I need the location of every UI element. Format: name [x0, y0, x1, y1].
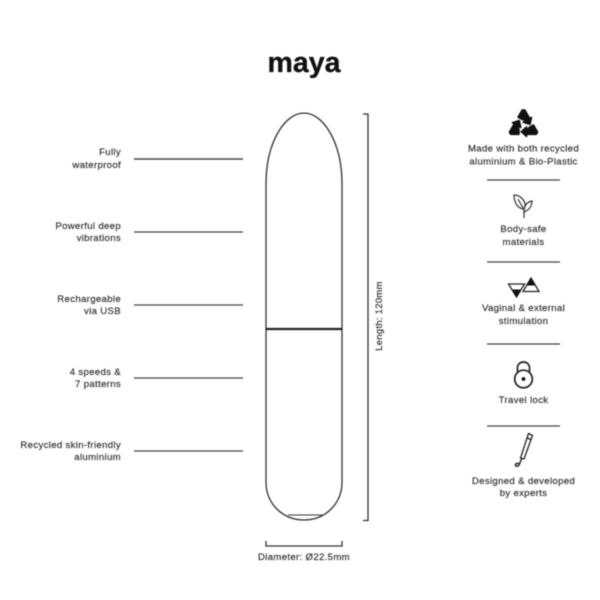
- benefit: travel lock: Travel lock: [499, 395, 548, 406]
- panel: right benefits: [468, 110, 579, 499]
- feature: speeds and patterns: [70, 367, 243, 390]
- feature: rechargeable via USB: via USB: [84, 306, 121, 317]
- benefit: designed by experts: [472, 434, 575, 499]
- benefit: body-safe materials: materials: [503, 237, 544, 248]
- icon: recycling arrows: [506, 110, 540, 140]
- panel: left feature labels: [20, 147, 243, 463]
- feature: speeds and patterns: 4 speeds &: [70, 367, 121, 378]
- feature: powerful deep vibrations: vibrations: [77, 233, 121, 244]
- feature: rechargeable via USB: [57, 294, 243, 317]
- length dimension: [363, 114, 384, 520]
- benefit: vaginal and external stimulation: Vaginal & external: [482, 303, 565, 314]
- benefit: recycled materials: [468, 110, 579, 168]
- feature: speeds and patterns: 7 patterns: [75, 379, 121, 390]
- title: maya: [268, 47, 342, 79]
- benefit: recycled materials: aluminium & Bio-Plastic: [469, 156, 578, 168]
- feature: fully waterproof: [71, 147, 243, 171]
- benefit: recycled materials: Made with both recycled: [468, 144, 579, 154]
- benefit: vaginal and external stimulation: [482, 278, 565, 327]
- benefit: travel lock: [499, 362, 548, 406]
- length dimension: Length: 120mm: [373, 281, 384, 351]
- feature: recycled aluminium: Recycled skin-friendly: [20, 440, 121, 451]
- icon: triangles: [508, 278, 539, 297]
- feature: powerful deep vibrations: Powerful deep: [55, 221, 121, 232]
- icon: pen: [515, 434, 532, 466]
- benefit: body-safe materials: Body-safe: [500, 224, 547, 235]
- feature: powerful deep vibrations: [55, 221, 243, 244]
- benefit: designed by experts: by experts: [500, 488, 547, 499]
- feature: fully waterproof: Fully: [99, 147, 121, 158]
- product outline: [266, 113, 342, 520]
- icon: padlock: [515, 362, 532, 388]
- diameter dimension: Diameter: Ø22.5mm: [258, 552, 350, 563]
- diameter dimension: [258, 541, 350, 563]
- feature: recycled aluminium: aluminium: [74, 452, 121, 463]
- feature: recycled aluminium: [20, 440, 243, 463]
- icon: leaves: [514, 195, 532, 218]
- benefit: vaginal and external stimulation: stimulation: [499, 316, 548, 327]
- feature: rechargeable via USB: Rechargeable: [57, 294, 121, 305]
- benefit: body-safe materials: [500, 195, 547, 248]
- feature: fully waterproof: waterproof: [71, 160, 121, 171]
- benefit: designed by experts: Designed & developed: [472, 476, 575, 487]
